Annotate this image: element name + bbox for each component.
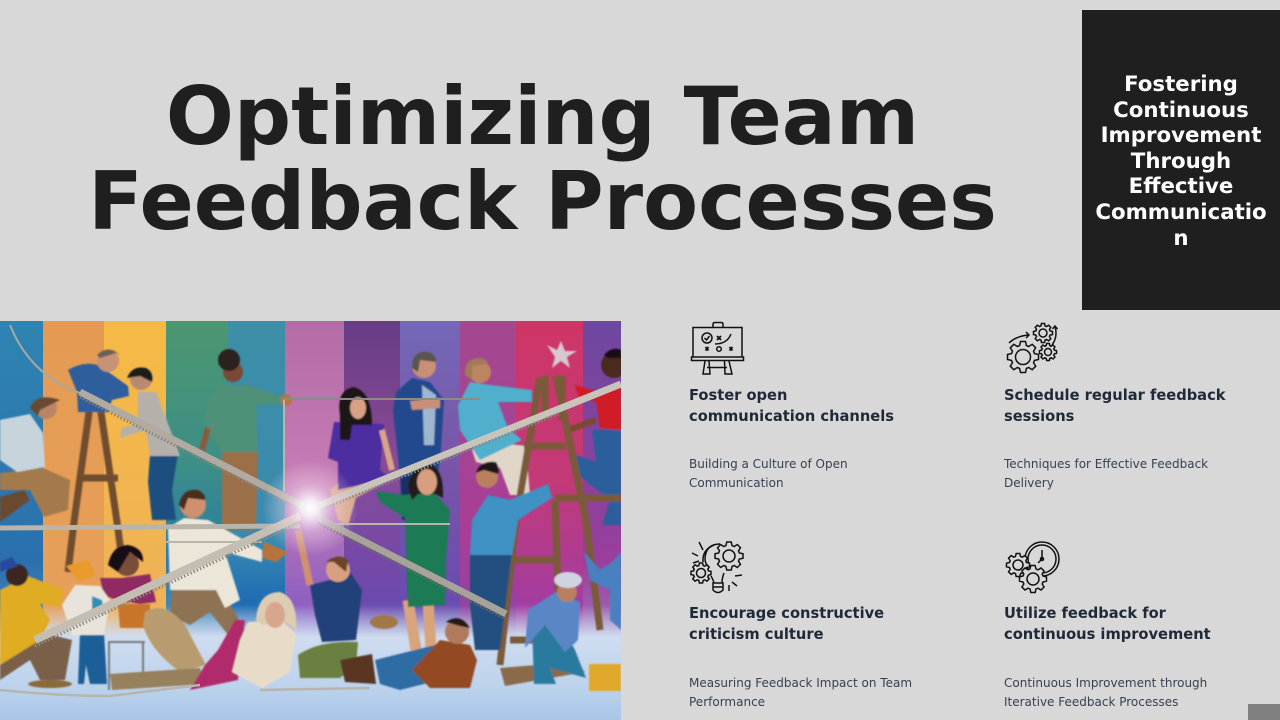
description: Delivery xyxy=(1004,476,1054,490)
figure: man in white shirt xyxy=(168,490,288,640)
feature: schedule regular feedback sessions xyxy=(1004,322,1226,490)
heading: Encourage constructive xyxy=(689,604,884,622)
description xyxy=(689,457,848,490)
figure: man in red shirt xyxy=(568,349,627,525)
heading: communication channels xyxy=(689,408,894,425)
rope: diagonal upper right xyxy=(320,384,621,505)
heading: Schedule regular feedback xyxy=(1004,386,1226,404)
subtitle text: Communicatio xyxy=(1095,200,1267,225)
figure: girl in magenta sweater xyxy=(100,545,156,628)
figure: man in striped shirt xyxy=(0,397,70,522)
ropes xyxy=(0,325,621,696)
figure: woman in green suit xyxy=(376,463,450,650)
icon: strategy board xyxy=(690,322,744,375)
icon: gears with arrows xyxy=(1006,322,1058,374)
subtitle text: Fostering xyxy=(1124,72,1238,97)
title xyxy=(88,70,997,248)
heading: sessions xyxy=(1004,408,1074,425)
heading xyxy=(689,386,894,425)
corner marker xyxy=(1248,704,1280,720)
subtitle text: Effective xyxy=(1129,174,1233,199)
figure: man in yellow jacket xyxy=(0,557,72,688)
figure: woman in teal top on stool xyxy=(458,358,532,495)
description xyxy=(689,676,912,709)
figure: woman in purple dress xyxy=(328,387,392,526)
description: Iterative Feedback Processes xyxy=(1004,695,1178,709)
description: Measuring Feedback Impact on Team xyxy=(689,676,912,690)
feature: utilize feedback for continuous improvement xyxy=(1004,541,1211,709)
rope: diagonal lower right xyxy=(318,518,506,614)
figure: man in blue shirt on ladder xyxy=(68,350,129,412)
figure: person at right edge xyxy=(584,552,621,630)
heading: Utilize feedback for xyxy=(1004,604,1166,622)
heading xyxy=(1004,386,1226,425)
figure: blonde woman on floor xyxy=(110,592,296,690)
heading: Foster open xyxy=(689,386,787,404)
feature: encourage constructive criticism culture xyxy=(689,541,912,709)
rope: diagonal upper left xyxy=(80,392,303,506)
figure: man in navy suit xyxy=(393,352,444,520)
description: Techniques for Effective Feedback xyxy=(1004,457,1208,471)
description: Communication xyxy=(689,476,784,490)
icon: gears with clock xyxy=(1006,541,1060,594)
panel: subtitle xyxy=(1082,10,1280,310)
figure: child with orange hat xyxy=(62,560,110,684)
description: Building a Culture of Open xyxy=(689,457,848,471)
star ornament xyxy=(547,341,577,368)
subtitle text: n xyxy=(1173,226,1189,251)
feature: foster open communication channels xyxy=(689,322,894,490)
light flare xyxy=(262,460,358,556)
title: Optimizing Team xyxy=(166,70,919,163)
figure: man in turban xyxy=(525,572,586,684)
subtitle text: Improvement xyxy=(1101,123,1261,148)
heading xyxy=(689,604,884,643)
subtitle text xyxy=(1095,72,1267,251)
description xyxy=(1004,457,1208,490)
figure: boy in grey sweater xyxy=(120,367,180,520)
rope: thin strands xyxy=(0,325,480,696)
icon: light bulb with gears xyxy=(690,541,744,594)
description: Continuous Improvement through xyxy=(1004,676,1207,690)
ladder right xyxy=(500,376,621,686)
floor xyxy=(0,605,621,720)
heading xyxy=(1004,604,1211,643)
title: Feedback Processes xyxy=(88,155,997,248)
rainbow wall xyxy=(0,321,621,720)
description: Performance xyxy=(689,695,765,709)
subtitle text: Continuous xyxy=(1113,98,1249,123)
figure: man in blue shirt xyxy=(470,462,552,650)
figure: woman in green shirt xyxy=(202,349,292,530)
rope: diagonal lower left xyxy=(35,516,300,640)
illustration: team pulling ropes in front of rainbow wall xyxy=(0,321,621,720)
description xyxy=(1004,676,1207,709)
heading: criticism culture xyxy=(689,626,824,643)
figure: reclining man xyxy=(340,615,477,690)
stool frame xyxy=(108,642,145,690)
yellow crate xyxy=(589,664,621,691)
heading: continuous improvement xyxy=(1004,626,1211,643)
ladder left xyxy=(68,405,122,572)
subtitle text: Through xyxy=(1131,149,1231,174)
figure: boy in navy hoodie xyxy=(298,530,362,678)
